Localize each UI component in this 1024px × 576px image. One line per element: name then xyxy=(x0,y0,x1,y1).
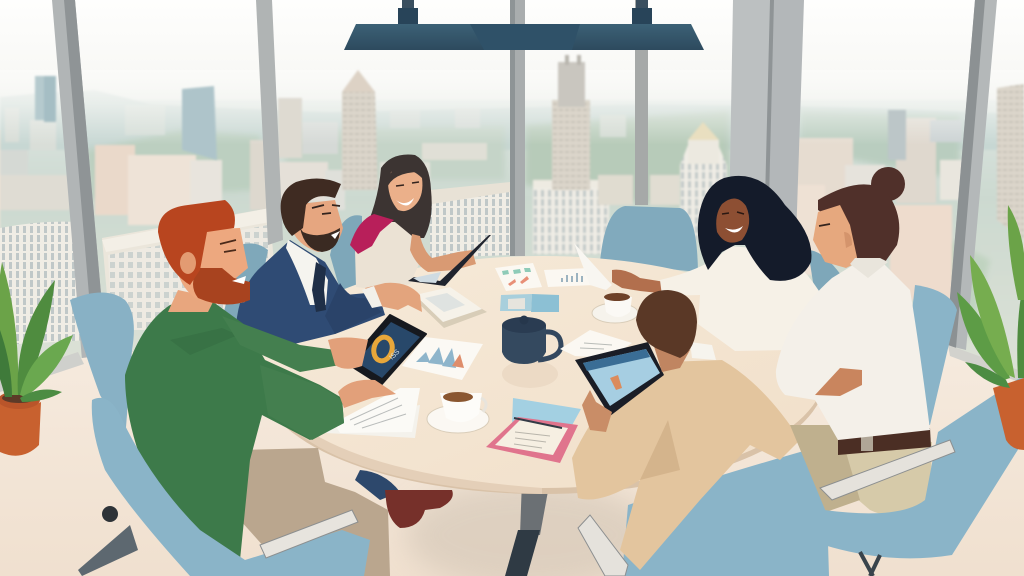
trousers xyxy=(825,440,932,517)
hand xyxy=(365,283,422,312)
paper with blue and orange chart xyxy=(402,337,483,380)
trousers xyxy=(240,448,390,576)
back chair: behind woman xyxy=(330,215,362,290)
paper right of mug xyxy=(560,330,632,358)
front-left chair xyxy=(92,398,370,576)
paper behind front man xyxy=(690,342,716,360)
shoes xyxy=(385,490,453,528)
dark blue mug reflection xyxy=(502,360,558,388)
man with hair bun xyxy=(776,167,932,517)
hands xyxy=(328,338,368,369)
front man chair xyxy=(578,445,829,576)
upper arm xyxy=(222,316,340,372)
notebook under suit man hand xyxy=(415,287,487,328)
tall towers in front of the haze xyxy=(35,55,1024,240)
open blue booklet xyxy=(500,294,559,312)
neck xyxy=(168,290,215,312)
paper with colour chart xyxy=(495,263,542,291)
coffee cup front xyxy=(427,392,489,433)
paper with bar chart xyxy=(544,268,595,287)
head xyxy=(290,200,343,252)
belt xyxy=(838,428,931,455)
torso xyxy=(125,296,344,560)
table items xyxy=(326,243,716,463)
back chair: behind dark-haired woman xyxy=(808,250,848,300)
tablet xyxy=(575,342,664,416)
right chair back xyxy=(900,285,957,425)
dark blue mug xyxy=(502,316,561,364)
woman in pink and cream top xyxy=(350,155,491,290)
atmospheric haze xyxy=(0,70,1024,145)
front man xyxy=(572,290,800,570)
plant right xyxy=(957,205,1024,450)
head xyxy=(176,228,248,304)
pendant lamp xyxy=(344,0,704,50)
green sweater man xyxy=(125,200,396,576)
plant left xyxy=(0,262,73,456)
foreground buildings left xyxy=(0,182,510,345)
back chair: centre xyxy=(600,206,698,272)
round table xyxy=(259,256,825,494)
window sky xyxy=(0,0,1024,130)
front-right chair xyxy=(820,375,1024,576)
head hair xyxy=(636,290,697,358)
table pedestal xyxy=(405,480,655,576)
suit man xyxy=(236,178,453,528)
hair xyxy=(158,200,235,285)
tablet with ring chart: ISS xyxy=(388,348,402,361)
shirt xyxy=(776,262,930,440)
floor xyxy=(0,330,1024,576)
window frames xyxy=(52,0,997,360)
torso and suit xyxy=(236,240,385,345)
tablet with ring chart xyxy=(348,315,426,385)
back-left chair xyxy=(70,292,138,576)
coffee cup back right xyxy=(592,293,638,323)
sheet held by dark-haired woman xyxy=(574,243,612,290)
pink folder with clipboard xyxy=(486,398,581,463)
back chair: behind suit man xyxy=(222,243,268,340)
city skyline xyxy=(0,90,1024,380)
dark-haired woman xyxy=(612,176,830,351)
hand xyxy=(582,390,612,432)
stack of papers xyxy=(326,388,420,438)
